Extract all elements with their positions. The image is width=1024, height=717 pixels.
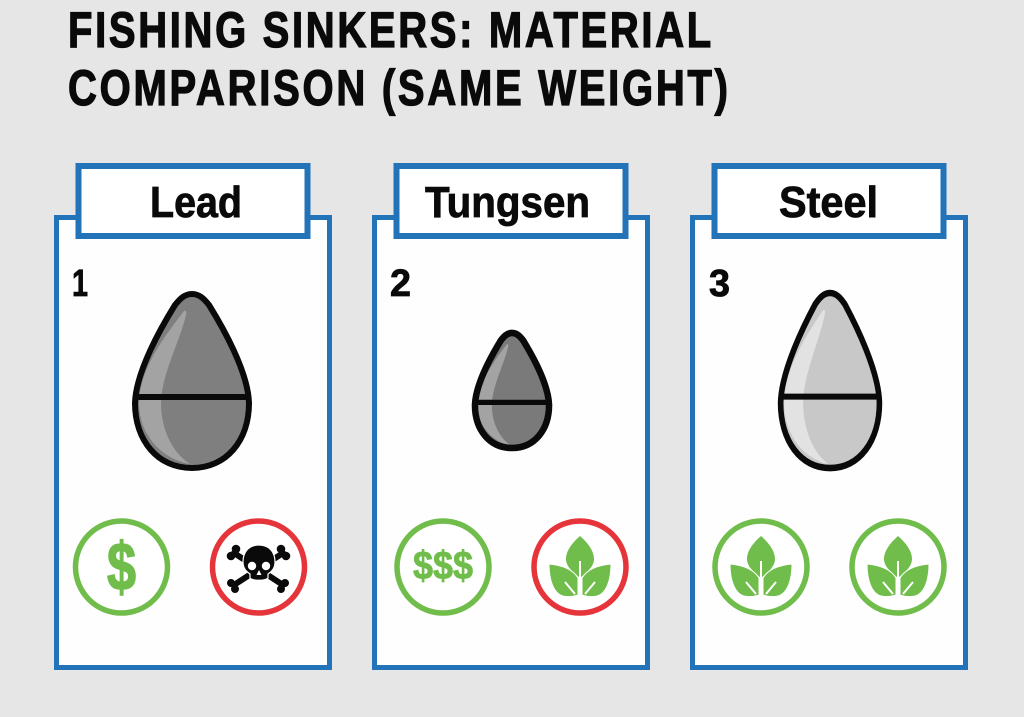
title: FISHING SINKERS: MATERIAL (68, 2, 711, 58)
icon: eco warning (534, 521, 626, 613)
sinker: lead (135, 294, 249, 468)
panel: tungsten (374, 166, 648, 668)
sinker: tungsten (475, 333, 549, 448)
tab: lead: Lead (150, 178, 242, 227)
panel frame: steel (692, 218, 966, 668)
title: COMPARISON (SAME WEIGHT) (68, 60, 728, 116)
icon: high cost: $$$ (413, 544, 473, 588)
tab: tungsten (396, 166, 626, 236)
title (68, 2, 728, 116)
number 2: 2 (390, 263, 411, 305)
tab: tungsten: Tungsen (425, 178, 590, 227)
sinker: steel (781, 293, 879, 468)
icon: low cost: $ (107, 529, 136, 605)
icon: eco safe two (852, 521, 944, 613)
tab: steel (714, 166, 944, 236)
tab: lead (78, 166, 308, 236)
panel: lead (56, 166, 330, 668)
panel frame: lead (56, 218, 330, 668)
icon: low cost (76, 521, 168, 613)
tab: steel: Steel (779, 178, 878, 227)
panel frame: tungsten (374, 218, 648, 668)
icon: high cost (397, 521, 489, 613)
number 3: 3 (709, 263, 730, 305)
icon: eco safe one (715, 521, 807, 613)
icon: toxic (212, 521, 304, 613)
panel: steel (692, 166, 966, 668)
number 1: 1 (72, 263, 88, 305)
